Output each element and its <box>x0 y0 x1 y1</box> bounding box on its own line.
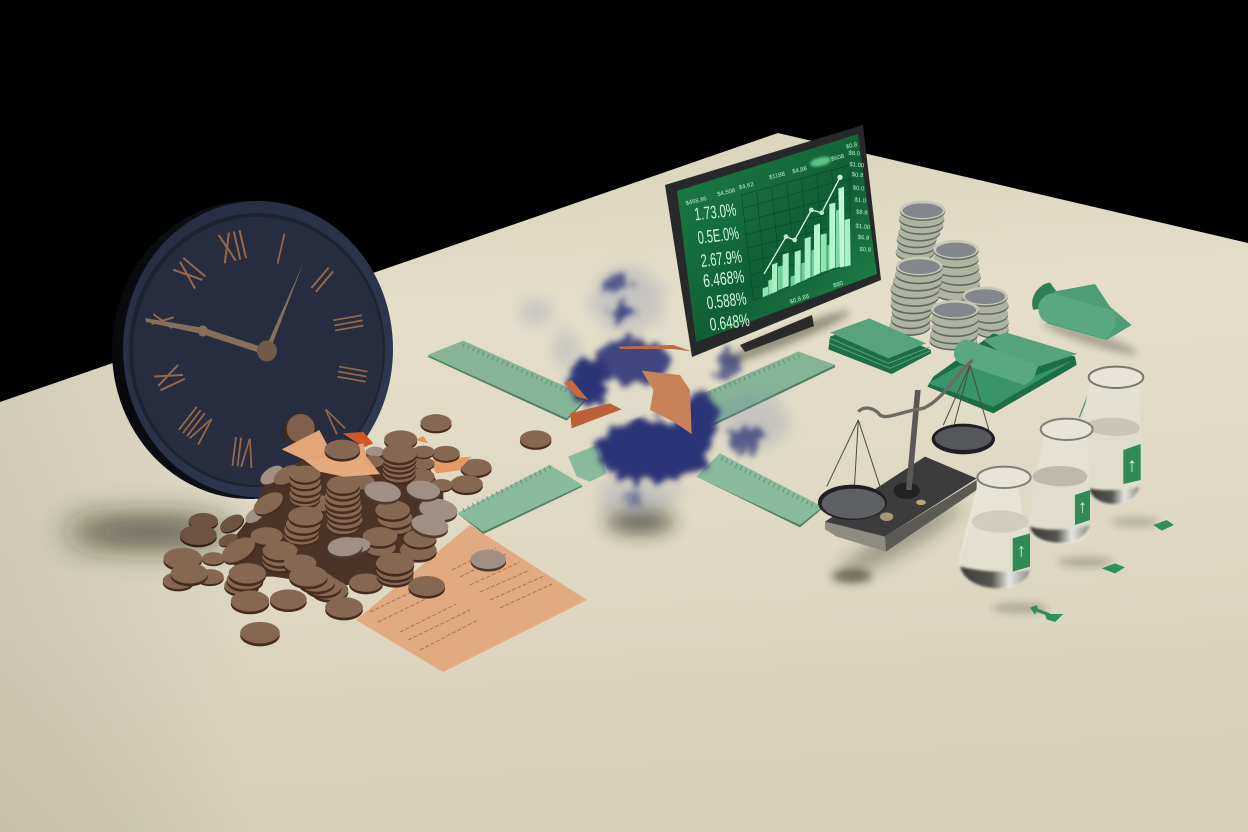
orange paper: top pieces <box>282 430 380 477</box>
right pan <box>932 365 995 454</box>
green note stack <box>828 318 931 374</box>
monitor <box>665 125 881 357</box>
coin pile <box>163 410 551 646</box>
stack: middle <box>933 240 981 302</box>
orange paper: back piece <box>343 432 472 473</box>
green notebook <box>927 333 1077 413</box>
green paper group <box>828 283 1132 413</box>
flask: middle <box>1030 419 1093 545</box>
flask: front: ↑ <box>1017 540 1026 561</box>
balance scale <box>818 360 995 552</box>
curled green note <box>1032 283 1132 340</box>
roman numerals: I <box>273 225 289 274</box>
flask: middle: ↑ <box>1078 497 1087 517</box>
small screen labels: $8.0 <box>848 151 861 158</box>
orange fragments <box>564 345 693 434</box>
percentage readouts: 0.648% <box>709 310 751 335</box>
coin layers <box>384 430 417 451</box>
clock rim <box>123 201 393 497</box>
trend line <box>764 175 843 274</box>
monitor stand <box>740 315 814 352</box>
small screen labels <box>685 142 872 306</box>
roman numerals: V <box>315 399 350 440</box>
roman numerals: XI <box>166 251 215 296</box>
small screen labels: $0.0 <box>852 186 865 193</box>
ruler: back right <box>703 352 835 426</box>
dense smoke <box>569 273 762 508</box>
silver coin stacks <box>890 201 1009 350</box>
small green tags <box>1030 520 1174 622</box>
stack: front right <box>930 300 979 350</box>
flask: back: ↑ <box>1127 455 1137 477</box>
ruler: front right <box>697 453 823 527</box>
flasks <box>959 367 1143 589</box>
stack: back right <box>962 287 1009 338</box>
clock hands <box>145 264 303 362</box>
percentage readouts: 6.468% <box>702 266 745 291</box>
small screen labels: $8.8 <box>856 210 868 217</box>
small screen labels: $458.86 <box>685 196 708 207</box>
percentage readouts: 1.73.0% <box>693 200 737 225</box>
smoke burst <box>520 267 787 515</box>
roman numerals: VIII <box>172 398 222 452</box>
percentage readouts: 2.67.9% <box>700 246 743 271</box>
shadows on the table <box>65 305 1159 613</box>
percentage readouts <box>693 200 751 335</box>
small screen labels: $1188 <box>769 171 786 181</box>
small coins on base <box>880 512 893 521</box>
small screen labels: $1.0 <box>854 198 867 205</box>
chart and text drawn in zoom coordinates <box>685 142 872 335</box>
roman numerals: III <box>324 311 372 335</box>
clock body <box>112 201 388 499</box>
tag: upper <box>1153 520 1174 531</box>
clock <box>112 201 393 499</box>
small screen labels: $4,88 <box>792 166 808 175</box>
small screen labels: $4,508 <box>717 188 737 198</box>
roman numerals: VII <box>229 428 257 477</box>
scale post <box>893 390 921 499</box>
scale base <box>825 457 977 552</box>
stack: front left <box>890 257 943 336</box>
small screen labels: $0.8.88 <box>789 294 811 306</box>
stack: tallest <box>896 201 945 262</box>
roman numerals: IX <box>146 360 194 396</box>
upright coin <box>279 410 319 449</box>
small screen labels: $0.8 <box>851 172 864 179</box>
percentage readouts: 0.588% <box>706 288 748 313</box>
faint wisps <box>520 267 787 515</box>
small screen labels: $4,62 <box>738 182 755 191</box>
percentage readouts: 0.5E.0% <box>697 223 740 248</box>
small screen labels: $0.8 <box>859 247 872 254</box>
monitor frame <box>665 125 881 357</box>
bar chart <box>763 187 851 297</box>
left pan <box>818 420 887 520</box>
crossed green rulers <box>427 341 835 534</box>
monitor screen <box>677 134 877 342</box>
roman numerals: II <box>304 259 341 300</box>
ruler: front left <box>457 465 583 534</box>
small screen labels: $1.00 <box>849 162 865 169</box>
small screen labels: $608 <box>831 154 846 163</box>
arrow tag <box>1030 605 1063 622</box>
clear centre <box>614 394 646 419</box>
orange document <box>356 525 587 672</box>
small screen labels: $80 <box>833 280 845 289</box>
roman numerals <box>146 222 376 477</box>
chart grid <box>742 165 850 300</box>
clock face <box>129 213 385 487</box>
roman numerals: III <box>328 362 376 386</box>
screen highlight <box>809 155 832 168</box>
tag: middle <box>1102 563 1125 573</box>
loose coins at back <box>420 414 452 433</box>
flask: back <box>1079 367 1143 504</box>
ruler: back left <box>427 341 588 421</box>
small screen labels: $6.8 <box>857 235 870 242</box>
flask: front <box>959 467 1031 589</box>
small screen labels: $1.00 <box>855 224 871 231</box>
ruler: centre piece <box>568 445 607 482</box>
scale beam <box>858 360 973 417</box>
roman numerals: X <box>147 311 181 331</box>
roman numerals: XII <box>215 222 251 273</box>
pile mass underneath <box>230 453 443 587</box>
small screen labels: $0.8 <box>845 142 859 151</box>
